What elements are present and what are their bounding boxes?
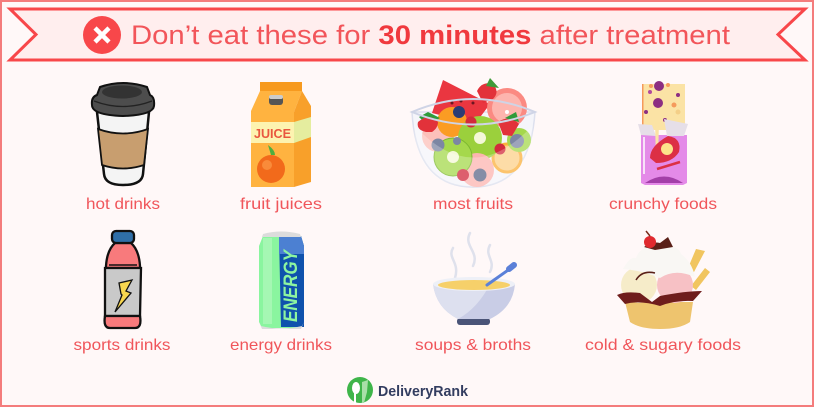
icon: energy can: ENERGY [281, 248, 302, 322]
icon: energy can [259, 232, 304, 329]
icon: juice carton: JUICE [254, 126, 291, 141]
icon: snack bar [638, 81, 688, 185]
label: sports drinks: sports drinks [74, 337, 170, 354]
logo: DeliveryRank [347, 377, 469, 404]
label: soups & broths: soups & broths [415, 337, 531, 354]
icon: juice carton [251, 82, 311, 187]
logo wordmark: DeliveryRank [378, 383, 469, 400]
icon: fruit bowl [412, 78, 535, 187]
icon: red cross [83, 16, 121, 54]
label: cold & sugary foods: cold & sugary foods [585, 337, 741, 354]
label: hot drinks: hot drinks [86, 196, 160, 213]
icon: ice cream sundae [617, 231, 710, 329]
icon: logo mark [347, 377, 373, 404]
label: most fruits: most fruits [433, 196, 513, 213]
icon: coffee cup [92, 83, 154, 185]
title ribbon [10, 9, 805, 60]
label: crunchy foods: crunchy foods [609, 196, 717, 213]
title: Don’t eat these for 30 minutes after treatment [131, 20, 731, 50]
icon: soup bowl [433, 233, 515, 325]
label: fruit juices: fruit juices [240, 196, 322, 213]
label: energy drinks: energy drinks [230, 337, 332, 354]
icon: sports bottle [105, 231, 141, 328]
